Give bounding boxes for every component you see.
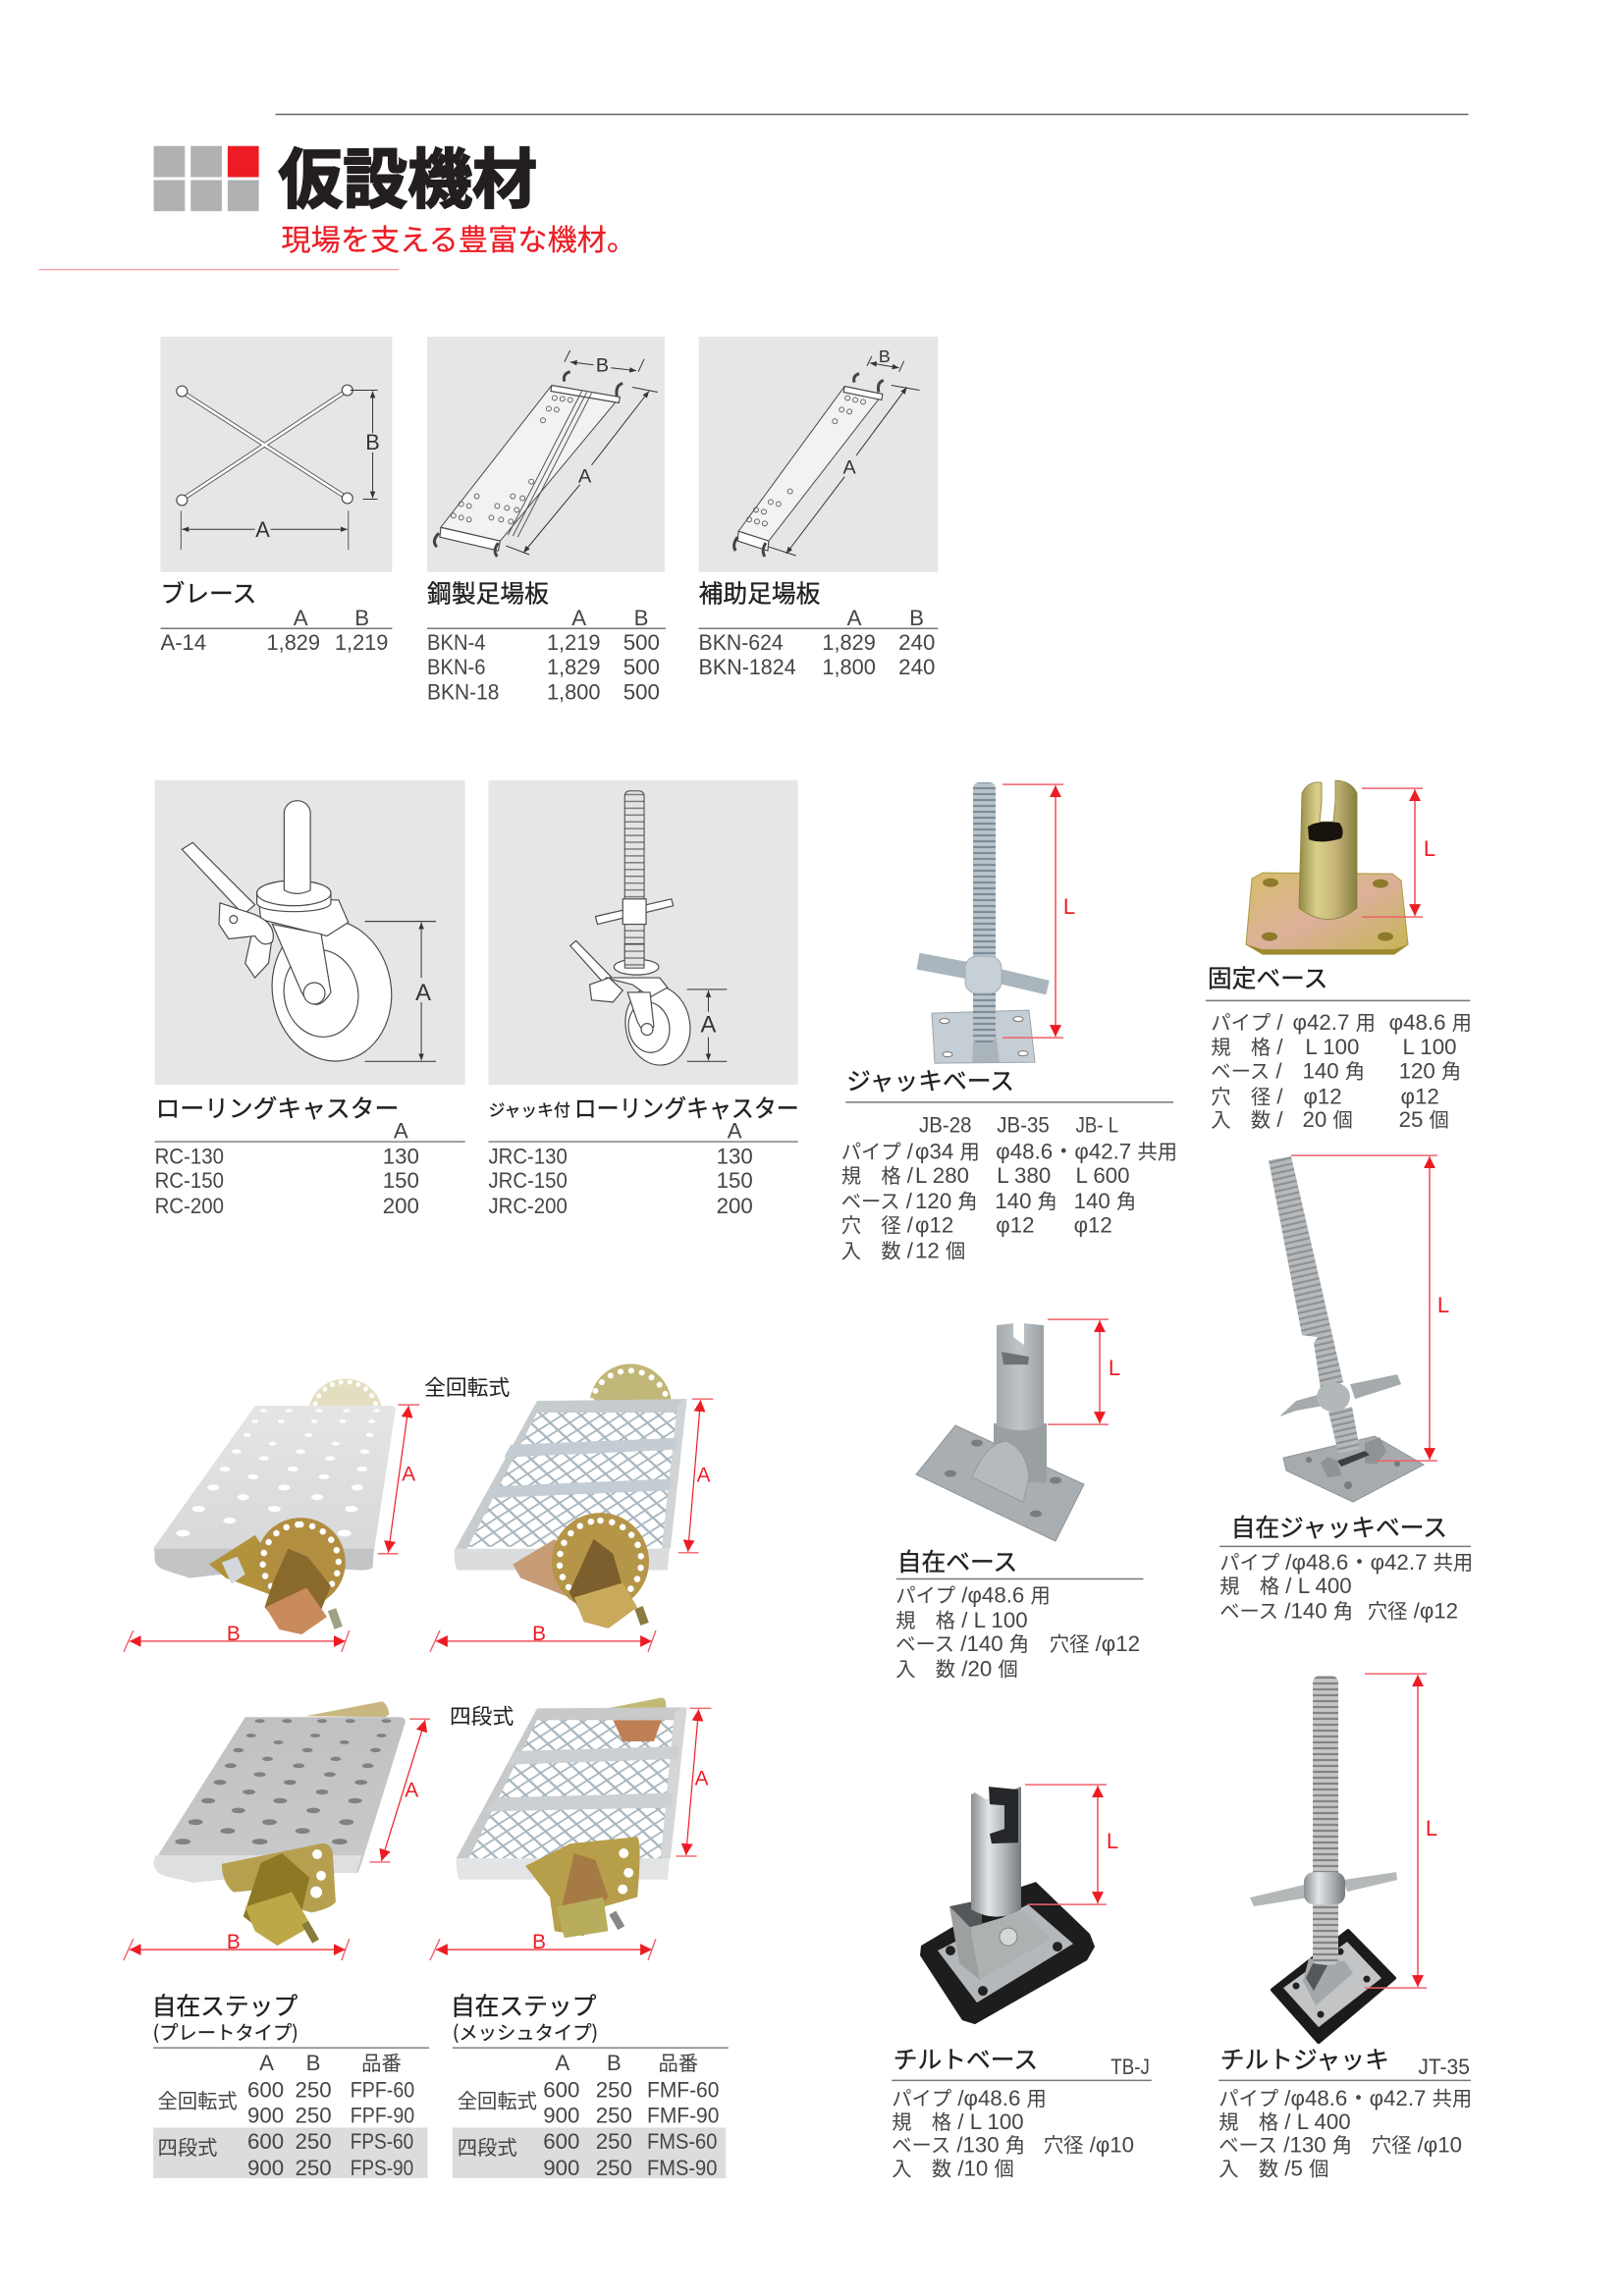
spec table: 25 個 (1399, 1103, 1449, 1133)
header: section title (39, 128, 636, 270)
spec table: φ12 (1074, 1213, 1112, 1238)
spec table: FPS-90 (351, 2156, 413, 2180)
frame and mesh (455, 1399, 687, 1571)
spec table: 250 (596, 2103, 632, 2127)
spec table (427, 606, 666, 705)
frame and mesh (457, 1707, 687, 1880)
spec table: パイプ / (841, 1135, 914, 1164)
diagram: rolling caster: A (415, 980, 431, 1006)
spec table: ベース / (841, 1185, 913, 1214)
spec table: 規 格 / (1211, 1031, 1283, 1060)
dimension A (678, 1399, 713, 1553)
dimension B: B (532, 1623, 546, 1645)
spec table: φ42.7 用 (1293, 1006, 1376, 1036)
dimension B (430, 1623, 656, 1652)
heading: ジャッキ付 (488, 1096, 570, 1121)
spec table: L 100 (1305, 1035, 1359, 1059)
diagram: brace: A (255, 517, 270, 542)
panel: fixed base (1206, 780, 1472, 1133)
plate (154, 1717, 406, 1883)
dimension B: B (532, 1931, 546, 1953)
panel: auxiliary scaffold board (699, 337, 938, 679)
dimension B (124, 1931, 350, 1960)
spec table: RC-150 (155, 1168, 224, 1193)
photo: plate step, four-position (124, 1701, 430, 1960)
spec table: パイプ / (1211, 1006, 1283, 1036)
heading: 自在ステップ (152, 1987, 298, 2022)
spec table (458, 2047, 719, 2180)
spec table: A (294, 606, 308, 630)
panel: brace (161, 337, 392, 655)
spec table: 120 角 (915, 1185, 978, 1214)
spec table (841, 1113, 1177, 1263)
spec table: A (847, 606, 862, 630)
spec table: BKN-4 (427, 630, 486, 655)
spec table: FPF-60 (351, 2078, 414, 2103)
spec table: BKN-624 (699, 630, 784, 655)
diagram: steel board: B (596, 355, 609, 377)
rear bracket (597, 1697, 666, 1710)
sub heading: (メッシュタイプ) (453, 2017, 598, 2045)
spec table: 品番 (361, 2047, 402, 2076)
spec table: 250 (596, 2078, 632, 2103)
heading: 固定ベース (1208, 959, 1327, 994)
panel: jack base (841, 782, 1177, 1263)
heading: 自在ベース (897, 1543, 1017, 1578)
spec table (1211, 1006, 1472, 1133)
panel: tilt jack (1218, 1674, 1472, 2182)
spec table: 500 (623, 630, 660, 655)
spec table: 規 格 / (841, 1159, 914, 1189)
panel: universal step, plate type table (152, 1987, 429, 2180)
diagram: rolling caster (155, 780, 465, 1085)
clamp (513, 1513, 649, 1629)
spec table (1219, 1546, 1473, 1625)
spec table: JB- L (1076, 1113, 1118, 1138)
subtitle: 現場を支える豊富な機材。 (281, 216, 636, 259)
spec table: JRC-200 (488, 1194, 568, 1218)
spec table: 20 個 (1302, 1103, 1353, 1133)
spec table: 1,829 (267, 630, 320, 655)
spec table (699, 606, 938, 679)
title: 仮設機材 (278, 128, 537, 221)
panel: universal base (895, 1319, 1143, 1682)
spec table: JRC-130 (488, 1144, 568, 1168)
spec table: BKN-1824 (699, 655, 796, 679)
photo: tilt jack (1250, 1676, 1397, 2042)
spec table: 入 数 / (841, 1234, 914, 1263)
heading: 自在ステップ (451, 1987, 597, 2022)
spec table: パイプ /φ48.6・φ42.7 共用 (1219, 1546, 1473, 1575)
spec table: 600 (543, 2129, 579, 2154)
spec table: 入 数 / (1211, 1103, 1283, 1133)
heading: チルトジャッキ (1220, 2041, 1389, 2076)
dimension A: A (695, 1768, 709, 1790)
dimension A: A (405, 1780, 418, 1802)
spec table: 250 (296, 2156, 332, 2180)
spec table: B (607, 2051, 622, 2075)
icon: six-square logo (154, 146, 259, 211)
spec table: A (555, 2051, 569, 2075)
spec table: 規 格 / L 400 (1218, 2106, 1351, 2135)
diagram: brace: B (365, 430, 380, 454)
spec table: 250 (296, 2129, 332, 2154)
spec table: 140 角 (1074, 1185, 1136, 1214)
heading: ローリングキャスター (574, 1090, 799, 1125)
spec table: φ12 (1303, 1084, 1342, 1108)
diagram: auxiliary board (699, 337, 938, 572)
spec table: 穴径 /φ10 (1044, 2129, 1134, 2159)
spec table: BKN-18 (427, 680, 499, 705)
spec table: 240 (898, 655, 935, 679)
photo: universal jack base (1269, 1156, 1424, 1502)
spec table: φ12 (915, 1213, 953, 1238)
spec table: 500 (623, 655, 660, 679)
heading: 補助足場板 (699, 575, 821, 611)
spec table (155, 1119, 465, 1218)
shaded rows (153, 2127, 428, 2178)
dimension A (677, 1708, 711, 1856)
diagram: jack caster (488, 780, 798, 1085)
spec table: 250 (296, 2103, 332, 2127)
spec table: 250 (596, 2156, 632, 2180)
spec table: 穴径 /φ10 (1372, 2129, 1462, 2159)
spec table: 900 (543, 2156, 579, 2180)
spec table: FMF-90 (647, 2103, 719, 2127)
spec table: 四段式 (158, 2131, 217, 2161)
spec table: 900 (247, 2156, 284, 2180)
spec table (892, 2082, 1134, 2182)
spec table: A (394, 1119, 408, 1144)
spec table: 1,800 (547, 680, 600, 705)
spec table: RC-130 (155, 1144, 224, 1168)
spec table: L 380 (997, 1163, 1051, 1188)
spec table: 入 数 /10 個 (892, 2153, 1014, 2182)
spec table: 1,829 (822, 630, 876, 655)
spec table: 240 (898, 630, 935, 655)
dimension L: L (1437, 1293, 1449, 1317)
diagram: auxiliary board: A (843, 457, 857, 479)
spec table: φ12 (996, 1213, 1035, 1238)
dimension L: L (1426, 1816, 1437, 1841)
spec table: A (728, 1119, 742, 1144)
spec table: ベース /130 角 (1218, 2129, 1352, 2159)
spec table: パイプ /φ48.6 用 (892, 2082, 1047, 2111)
heading: ブレース (161, 575, 256, 611)
spec table: 200 (383, 1194, 419, 1218)
heading (488, 1090, 799, 1125)
spec table: A (571, 606, 586, 630)
label: 全回転式: 全回転式 (424, 1371, 510, 1402)
spec table: 四段式 (458, 2131, 517, 2161)
photo: fixed base (1246, 780, 1408, 954)
spec table (895, 1578, 1140, 1682)
spec table: B (634, 606, 649, 630)
diagram: auxiliary board: B (879, 347, 891, 366)
spec table: JB-35 (997, 1113, 1050, 1138)
photo: jack base (918, 782, 1048, 1063)
pink rule (39, 269, 399, 271)
rear bracket (305, 1701, 389, 1717)
spec table: 600 (543, 2078, 579, 2103)
diagram: jack caster: A (701, 1012, 717, 1039)
spec table (161, 606, 392, 655)
top rule (275, 114, 1468, 116)
clamp (222, 1843, 336, 1946)
dimension L: L (1424, 836, 1435, 861)
spec table: 入 数 /20 個 (895, 1653, 1018, 1682)
dimension A: A (402, 1463, 415, 1485)
spec table: 140 角 (1302, 1055, 1365, 1085)
spec table: JB-28 (919, 1113, 972, 1138)
dimension B (124, 1623, 350, 1652)
spec table: BKN-6 (427, 655, 486, 679)
spec table: 12 個 (915, 1234, 965, 1263)
dimension L: L (1109, 1356, 1120, 1380)
spec table: RC-200 (155, 1194, 224, 1218)
spec table: B (306, 2051, 321, 2075)
spec table: 250 (596, 2129, 632, 2154)
spec table: 1,800 (822, 655, 876, 679)
dimension L: L (1107, 1829, 1118, 1853)
spec table: 900 (543, 2103, 579, 2127)
panel: universal jack base (1219, 1155, 1473, 1625)
spec table: 品番 (658, 2047, 698, 2076)
dimension L (1048, 1319, 1120, 1424)
dimension L (1025, 1785, 1118, 1904)
spec table: 穴径 /φ12 (1050, 1628, 1140, 1657)
spec table: φ48.6 用 (1389, 1006, 1472, 1036)
spec table: 穴 径 / (841, 1209, 914, 1239)
spec table: B (354, 606, 369, 630)
sub heading: (プレートタイプ) (153, 2017, 298, 2045)
plate holes (176, 1409, 380, 1536)
photo: mesh step, four-position (430, 1697, 711, 1960)
panel: jack rolling caster (488, 780, 799, 1218)
shaded rows (453, 2127, 726, 2178)
spec table: 規 格 / L 100 (895, 1604, 1028, 1633)
photo: plate step, full rotation (124, 1379, 419, 1652)
spec table: FPF-90 (351, 2103, 414, 2127)
spec table (1218, 2082, 1472, 2182)
spec table (158, 2047, 414, 2180)
heading: 鋼製足場板 (427, 575, 549, 611)
spec table: 150 (383, 1168, 419, 1193)
spec table: φ34 用 (915, 1135, 980, 1164)
plate (154, 1406, 396, 1578)
spec table: 600 (247, 2078, 284, 2103)
spec table: FMF-60 (647, 2078, 719, 2103)
spec table: ベース /140 角 (895, 1628, 1029, 1657)
model code: JT-35 (1418, 2055, 1470, 2079)
spec table: φ48.6・φ42.7 共用 (996, 1135, 1177, 1164)
spec table: 120 角 (1399, 1055, 1461, 1085)
spec table: 900 (247, 2103, 284, 2127)
spec table: 500 (623, 680, 660, 705)
spec table: L 600 (1076, 1163, 1130, 1188)
spec table: 1,829 (547, 655, 600, 679)
spec table: FPS-60 (351, 2129, 413, 2154)
spec table: 全回転式 (158, 2085, 238, 2114)
spec table: 250 (296, 2078, 332, 2103)
diagram: brace (161, 337, 392, 572)
heading: チルトベース (893, 2041, 1038, 2076)
spec table: パイプ /φ48.6 用 (895, 1578, 1051, 1608)
spec table: FMS-90 (647, 2156, 717, 2180)
spec table: L 100 (1403, 1035, 1456, 1059)
plate holes (175, 1719, 391, 1844)
spec table: ベース /140 角 (1219, 1595, 1353, 1625)
spec table: 130 (383, 1144, 419, 1168)
clamp (209, 1518, 346, 1634)
photo: universal base (916, 1323, 1084, 1541)
spec table: 600 (247, 2129, 284, 2154)
dimension B (430, 1931, 656, 1960)
heading: ローリングキャスター (156, 1090, 399, 1125)
spec table: B (909, 606, 924, 630)
model code: TB-J (1110, 2055, 1150, 2079)
panel: steel scaffold board (427, 337, 666, 705)
spec table: ベース /130 角 (892, 2129, 1025, 2159)
spec table: φ12 (1401, 1084, 1439, 1108)
rear disc (309, 1379, 381, 1406)
spec table: 140 角 (995, 1185, 1057, 1214)
heading: 自在ジャッキベース (1231, 1509, 1447, 1544)
spec table: 穴径 /φ12 (1368, 1595, 1458, 1625)
diagram: steel board (427, 337, 665, 572)
spec table: FMS-60 (647, 2129, 717, 2154)
spec table: 1,219 (547, 630, 600, 655)
spec table: ベース / (1211, 1055, 1282, 1085)
spec table: パイプ /φ48.6・φ42.7 共用 (1218, 2082, 1472, 2111)
spec table: 規 格 / L 400 (1219, 1570, 1352, 1599)
label: 四段式: 四段式 (450, 1700, 514, 1731)
dimension L (1362, 788, 1435, 917)
dimension A (378, 1405, 419, 1554)
spec table (488, 1119, 798, 1218)
spec table: 150 (717, 1168, 753, 1193)
panel: universal step, mesh type table (451, 1987, 729, 2180)
diagram: steel board: A (578, 466, 592, 488)
dimension A: A (697, 1464, 711, 1486)
spec table: 入 数 /5 個 (1218, 2153, 1328, 2182)
clamp (525, 1837, 640, 1938)
spec table: A-14 (161, 630, 206, 655)
spec table: JRC-150 (488, 1168, 568, 1193)
spec table: 200 (717, 1194, 753, 1218)
spec table: L 280 (915, 1163, 969, 1188)
photo: mesh step, full rotation (430, 1363, 713, 1652)
photo: tilt base (920, 1787, 1095, 2024)
dimension L: L (1063, 894, 1075, 919)
panel: tilt base (892, 1785, 1152, 2182)
spec table: A (259, 2051, 274, 2075)
dimension B: B (227, 1931, 241, 1953)
heading: ジャッキベース (846, 1062, 1014, 1097)
spec table: 1,219 (335, 630, 388, 655)
rear disc (590, 1363, 672, 1443)
spec table: 130 (717, 1144, 753, 1168)
spec table: 穴 径 / (1211, 1080, 1283, 1109)
dimension B: B (227, 1623, 241, 1645)
dimension A (370, 1719, 430, 1862)
panel: rolling caster (155, 780, 465, 1218)
spec table: 全回転式 (458, 2085, 537, 2114)
spec table: 規 格 / L 100 (892, 2106, 1024, 2135)
